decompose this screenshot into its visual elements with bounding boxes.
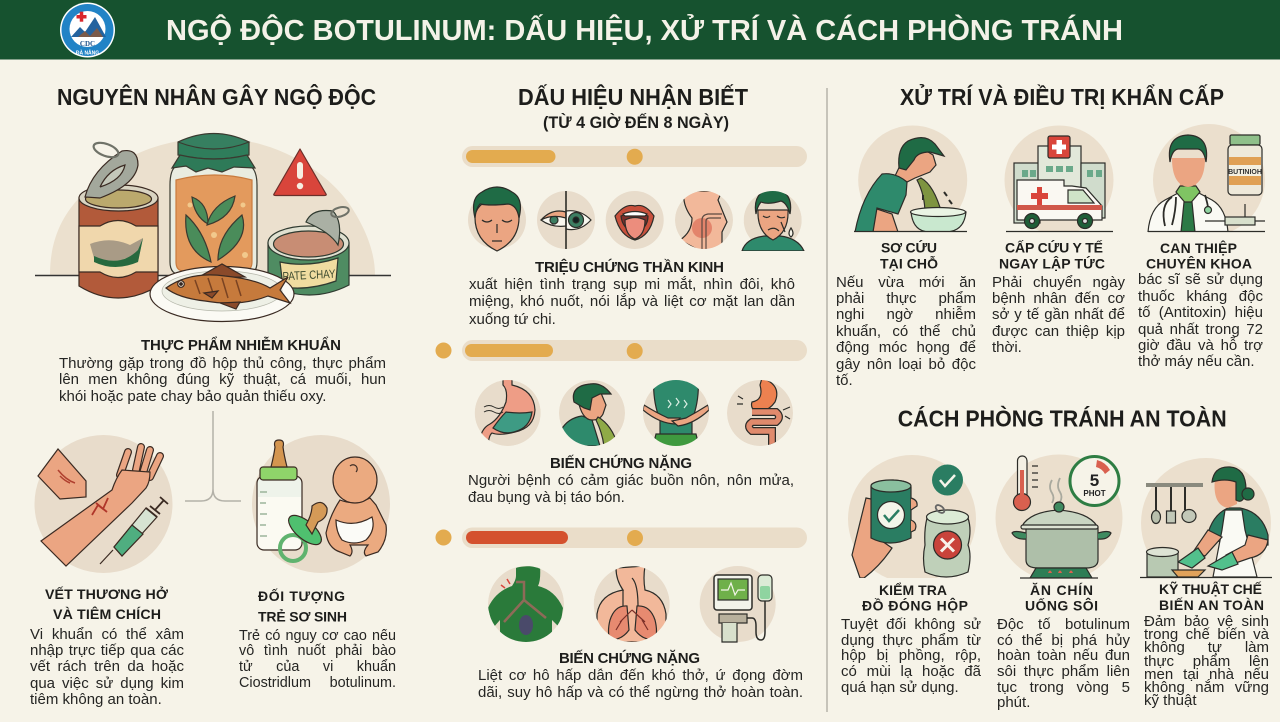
- text: inspect cans: [841, 617, 981, 699]
- text: safe processing: trong chế biến và: [1144, 626, 1269, 643]
- icon: double vision eyes: [537, 191, 595, 249]
- icon: hospital and ambulance: [1004, 126, 1114, 234]
- icon: large can: [79, 140, 158, 298]
- heading: inspect cans: ĐỒ ĐÓNG HỘP: [862, 597, 968, 614]
- text: first aid: động móc họng để: [836, 339, 976, 356]
- timeline 2: [436, 340, 807, 361]
- text: GI symptoms: [468, 472, 794, 508]
- icon: boil pot and timer: 5: [1090, 471, 1099, 490]
- text: neuro symptoms: [469, 276, 795, 330]
- text: contaminated food: [59, 356, 386, 408]
- icon: drooping eyelids face: [468, 187, 526, 251]
- icon: pate can: PATE CHAY: [282, 267, 336, 283]
- icon: facial paralysis man: [742, 187, 804, 251]
- text: cook thoroughly: tục trong vòng 5: [997, 679, 1130, 696]
- text: cook thoroughly: hoàn toàn nếu đun: [997, 647, 1130, 664]
- icon: nauseous stomach: [475, 378, 541, 450]
- panel: signs: [436, 83, 807, 704]
- text: cook thoroughly: có thể bị phá hủy: [997, 632, 1130, 649]
- text: neuro symptoms: miệng, khó nuốt, nói lắp và liệt cơ mặt lan dần: [469, 293, 795, 310]
- heading: infants: ĐỐI TƯỢNG: [258, 587, 345, 604]
- heading: emergency treatment: XỬ TRÍ VÀ ĐIỀU TRỊ KHẨN CẤP: [900, 82, 1224, 110]
- icon: warning triangle: [274, 149, 326, 196]
- text: emergency care: sở y tế gần nhất để: [992, 306, 1125, 323]
- heading: inspect cans: KIỂM TRA: [879, 581, 947, 598]
- heading: inspect cans: [862, 581, 968, 614]
- text: emergency care: [992, 275, 1125, 361]
- icon: lungs: [594, 566, 670, 642]
- panel: prevention: [841, 405, 1272, 715]
- icon: fish on plate: [150, 264, 294, 322]
- text: first aid: phải thực phẩm: [836, 290, 976, 307]
- timeline 3: [436, 528, 807, 548]
- text: first aid: gây nôn loại bỏ độc: [836, 356, 976, 373]
- icon: doctor and antitoxin: [1148, 124, 1265, 236]
- heading: GI symptoms: BIẾN CHỨNG NẶNG: [550, 454, 692, 472]
- icon: ventilator monitor: [700, 566, 776, 642]
- icon: inspect cans: [848, 455, 976, 583]
- heading: first aid: TẠI CHỖ: [880, 255, 938, 272]
- icon: first aid vomiting: [855, 126, 967, 234]
- heading: signs: (TỪ 4 GIỜ ĐẾN 8 NGÀY): [543, 113, 729, 132]
- heading: infants: [258, 587, 347, 624]
- text: cook thoroughly: phút.: [997, 694, 1030, 711]
- logo: CDC Đà Nẵng: [60, 2, 115, 58]
- text: safe processing: không nắm vững: [1144, 679, 1269, 696]
- text: wounds: [30, 627, 184, 713]
- heading: wounds: VẾT THƯƠNG HỞ: [45, 585, 169, 603]
- text: GI symptoms: đau bụng và bị táo bón.: [468, 489, 625, 506]
- text: safe processing: thực phẩm lên: [1144, 652, 1269, 670]
- heading: infants: TRẺ SƠ SINH: [258, 608, 347, 624]
- heading: first aid: [880, 239, 938, 272]
- text: neuro symptoms: xuất hiện tình trạng sụp mi mắt, nhìn đôi, khô: [469, 276, 795, 293]
- text: safe processing: kỹ thuật: [1144, 692, 1197, 709]
- text: emergency care: thời.: [992, 339, 1022, 356]
- heading: specialist care: CHUYÊN KHOA: [1146, 255, 1252, 272]
- heading: contaminated food: THỰC PHẨM NHIỄM KHUẨN: [141, 336, 341, 354]
- text: cook thoroughly: [997, 617, 1130, 715]
- text: safe processing: men tại nhà nếu: [1144, 666, 1269, 683]
- heading: first aid: SƠ CỨU: [881, 239, 937, 256]
- text: contaminated food: lên men không đúng kỹ thuật, cá muối, hun: [59, 371, 386, 388]
- heading: cook thoroughly: UỐNG SÔI: [1025, 596, 1098, 614]
- heading: cook thoroughly: ĂN CHÍN: [1030, 582, 1093, 598]
- text: wounds: nhập trực tiếp qua các: [30, 642, 184, 659]
- text: inspect cans: có mùi lạ hoặc đã: [841, 663, 981, 680]
- text: GI symptoms: Người bệnh có cảm giác buồn nôn, nôn mửa,: [468, 472, 794, 489]
- text: inspect cans: dụng thực phẩm từ: [841, 632, 981, 649]
- logo: CDC Đà Nẵng: ĐÀ NẴNG: [76, 50, 99, 56]
- panel: emergency treatment: [836, 82, 1265, 393]
- heading: safe processing: BIẾN AN TOÀN: [1159, 597, 1264, 613]
- icon: baby and bottle: [252, 435, 390, 573]
- icon: respiratory paralysis torso: [488, 566, 564, 642]
- text: infants: tử của vi khuẩn: [239, 659, 396, 675]
- heading: specialist care: [1146, 239, 1252, 272]
- text: specialist care: [1138, 272, 1263, 374]
- text: wounds: vết rách trên da hoặc: [30, 658, 184, 675]
- icon: pate can: [268, 205, 350, 295]
- icon: safe cooking: [1141, 458, 1271, 588]
- text: infants: Ciostridlum botulinum.: [239, 675, 396, 691]
- text: first aid: tố.: [836, 372, 853, 389]
- heading: safe processing: KỸ THUẬT CHẾ: [1159, 580, 1262, 597]
- text: infants: vô tình nuốt phải bào: [239, 643, 396, 659]
- title: NGỘ ĐỘC BOTULINUM: DẤU HIỆU, XỬ TRÍ VÀ CÁCH PHÒNG TRÁNH: [166, 13, 1123, 47]
- heading: neuro symptoms: TRIỆU CHỨNG THẦN KINH: [535, 258, 724, 276]
- heading: safe processing: [1159, 580, 1264, 613]
- timeline 1: [462, 146, 807, 167]
- icon: dry mouth: [606, 191, 664, 249]
- header banner: [0, 0, 1280, 60]
- connector: [185, 411, 241, 501]
- text: respiratory symptoms: dãi, suy hô hấp và có thể ngừng thở hoàn toàn.: [478, 684, 803, 701]
- heading: prevention: CÁCH PHÒNG TRÁNH AN TOÀN: [898, 405, 1227, 432]
- logo: CDC Đà Nẵng: CDC: [80, 40, 95, 48]
- text: inspect cans: hộp bị phồng, rộp,: [841, 647, 981, 664]
- text: inspect cans: quá hạn sử dụng.: [841, 679, 959, 696]
- text: first aid: nghi ngờ nhiễm: [836, 306, 976, 323]
- text: infants: [239, 629, 396, 695]
- text: specialist care: quả nhất trong 72: [1138, 321, 1263, 338]
- heading: respiratory symptoms: BIẾN CHỨNG NẶNG: [559, 649, 700, 667]
- text: specialist care: thuốc kháng độc: [1138, 288, 1263, 305]
- text: neuro symptoms: xuống tứ chi.: [469, 311, 556, 328]
- icon: boil pot and timer: [996, 454, 1122, 582]
- icon: wound and syringe: [34, 435, 172, 573]
- heading: wounds: [45, 585, 169, 623]
- heading: specialist care: CAN THIỆP: [1160, 239, 1237, 256]
- text: respiratory symptoms: [478, 668, 803, 704]
- text: cook thoroughly: sôi thực phẩm liên: [997, 663, 1130, 680]
- text: specialist care: thở máy nếu cần.: [1138, 353, 1255, 370]
- icon: throat: [675, 191, 733, 252]
- text: first aid: [836, 275, 976, 393]
- text: wounds: tiêm không an toàn.: [30, 691, 162, 708]
- text: safe processing: [1144, 615, 1269, 711]
- icon: fermented jar: [170, 134, 257, 275]
- text: specialist care: tố (Antitoxin) hiệu: [1138, 304, 1263, 321]
- heading: cook thoroughly: [1025, 582, 1098, 614]
- heading: wounds: VÀ TIÊM CHÍCH: [53, 605, 161, 623]
- heading: emergency care: NGAY LẬP TỨC: [999, 255, 1105, 272]
- text: wounds: qua việc sử dụng kim: [30, 675, 184, 692]
- text: emergency care: được can thiệp kịp: [992, 323, 1125, 340]
- text: specialist care: giờ đầu và hỗ trợ: [1138, 337, 1263, 354]
- heading: causes: NGUYÊN NHÂN GÂY NGỘ ĐỘC: [57, 83, 376, 110]
- text: safe processing: không tự làm: [1144, 639, 1269, 656]
- heading: signs: [518, 83, 748, 132]
- heading: emergency care: [999, 239, 1105, 272]
- heading: emergency care: CẤP CỨU Y TẾ: [1005, 239, 1103, 256]
- text: emergency care: bệnh nhân đến cơ: [992, 290, 1125, 307]
- text: first aid: khuẩn, có thể chủ: [836, 323, 976, 340]
- illustration: contaminated foods: [35, 134, 391, 322]
- icon: doctor and antitoxin: BUTINIOH: [1228, 169, 1262, 176]
- icon: intestines: [727, 378, 793, 448]
- heading: signs: DẤU HIỆU NHẬN BIẾT: [518, 83, 748, 110]
- icon: abdominal pain: [643, 380, 709, 446]
- icon: vomiting man: [559, 380, 625, 446]
- icon: boil pot and timer: PHOT: [1083, 489, 1106, 498]
- panel: causes: [30, 83, 396, 713]
- text: contaminated food: khói hoặc pate chay bảo quản thiếu oxy.: [59, 388, 326, 405]
